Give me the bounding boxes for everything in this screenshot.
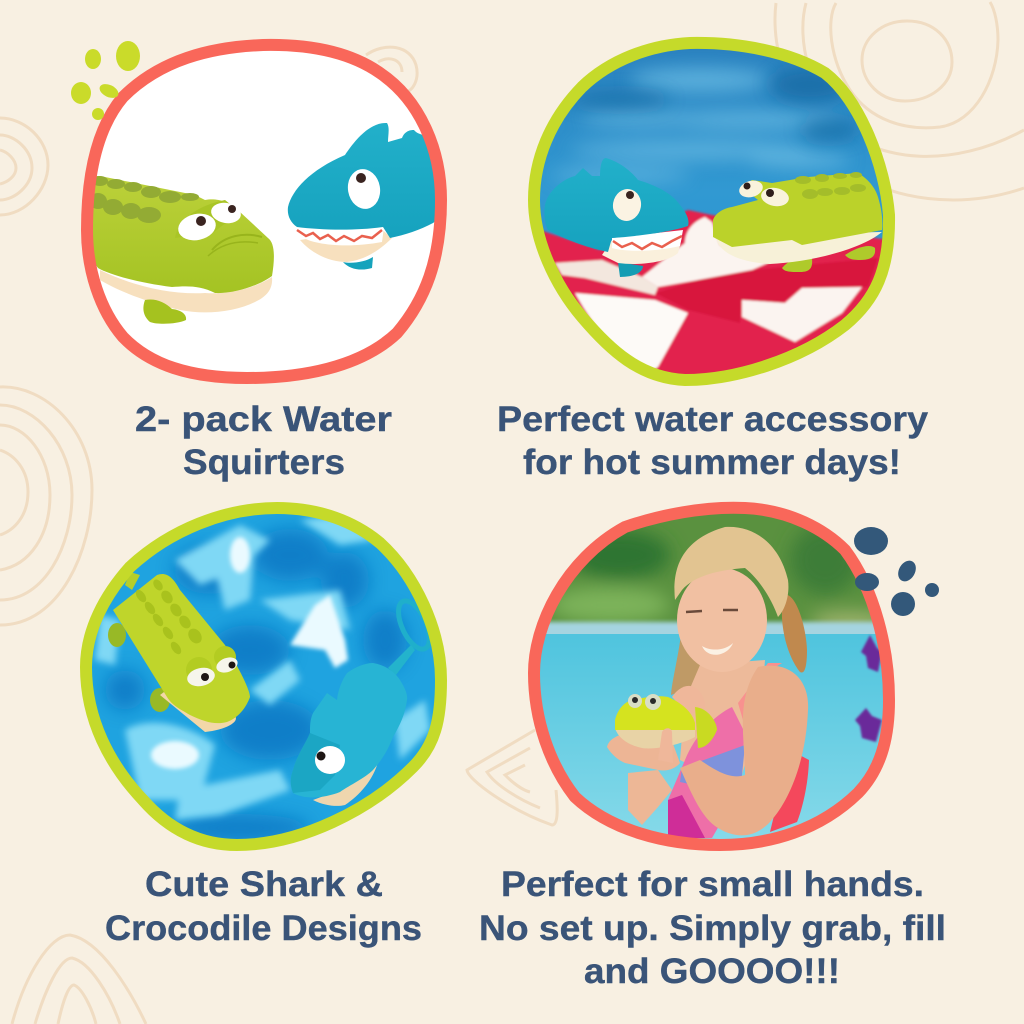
toy: shark — [288, 123, 440, 270]
blurred pool — [540, 48, 884, 252]
frame: green — [86, 508, 441, 845]
decorative swirl: top right — [775, 2, 1024, 200]
heading: perfect water accessory: Perfect water accessory — [497, 400, 929, 439]
heading: perfect for small hands: No set up. Simply grab, fill — [479, 909, 946, 948]
coral back of swimsuit — [770, 750, 809, 832]
heading: cute shark and crocodile designs — [105, 865, 422, 948]
photo scene — [92, 514, 435, 839]
panel: pool and towel photo — [525, 35, 895, 390]
purple flowers — [855, 635, 882, 742]
towel — [544, 208, 882, 374]
girl — [607, 527, 809, 838]
lower hand — [607, 736, 680, 770]
heading: cute shark and crocodile designs: Cute Shark & — [145, 865, 383, 904]
arm — [680, 666, 808, 835]
heading: 2-pack water squirters: 2- pack Water — [135, 400, 392, 439]
frame: coral — [534, 508, 889, 845]
back hair — [671, 639, 700, 695]
heading: 2-pack water squirters: Squirters — [183, 443, 345, 482]
decorative swirl: left middle — [0, 387, 92, 625]
panel: 2-pack water squirters — [85, 45, 441, 378]
water — [92, 514, 435, 839]
swimsuit — [668, 707, 745, 838]
panel: girl with squirter — [525, 500, 895, 854]
heading: perfect water accessory — [497, 400, 929, 482]
photo scene — [540, 48, 884, 374]
decorative swirl: bottom left — [12, 935, 146, 1024]
thumb — [660, 728, 672, 748]
icon: navy paint dots — [854, 527, 939, 616]
pool and garden — [550, 514, 872, 626]
eyes — [686, 610, 738, 612]
smile — [702, 643, 733, 655]
hair — [674, 527, 788, 617]
heading: 2-pack water squirters — [135, 400, 392, 482]
icon: green paint dots — [71, 41, 140, 120]
chest — [680, 660, 765, 780]
crocodile — [713, 172, 882, 272]
photo background: white — [87, 45, 441, 378]
heading: perfect for small hands — [479, 865, 946, 991]
frame: green — [534, 43, 889, 380]
heading: perfect water accessory: for hot summer days! — [523, 443, 901, 482]
photo scene — [540, 514, 883, 839]
decorative swirl: behind first photo — [366, 47, 417, 92]
upper hand — [672, 686, 691, 707]
shark — [291, 596, 436, 806]
crocodile — [108, 572, 250, 732]
toy: crocodile — [85, 176, 274, 324]
toy: crocodile held — [615, 694, 717, 748]
crocodile eyes — [176, 200, 241, 240]
heading: cute shark and crocodile designs: Crocodile Designs — [105, 909, 422, 948]
shark — [542, 158, 689, 277]
face — [677, 568, 767, 672]
left forearm — [628, 770, 672, 825]
panel: toys floating in water — [80, 500, 450, 855]
frame: coral — [87, 45, 441, 378]
heading: perfect for small hands: Perfect for small hands. — [501, 865, 924, 904]
heading: perfect for small hands: and GOOOO!!! — [584, 952, 840, 991]
decorative swirl: center — [467, 730, 557, 825]
decorative swirl: upper left — [0, 118, 48, 215]
